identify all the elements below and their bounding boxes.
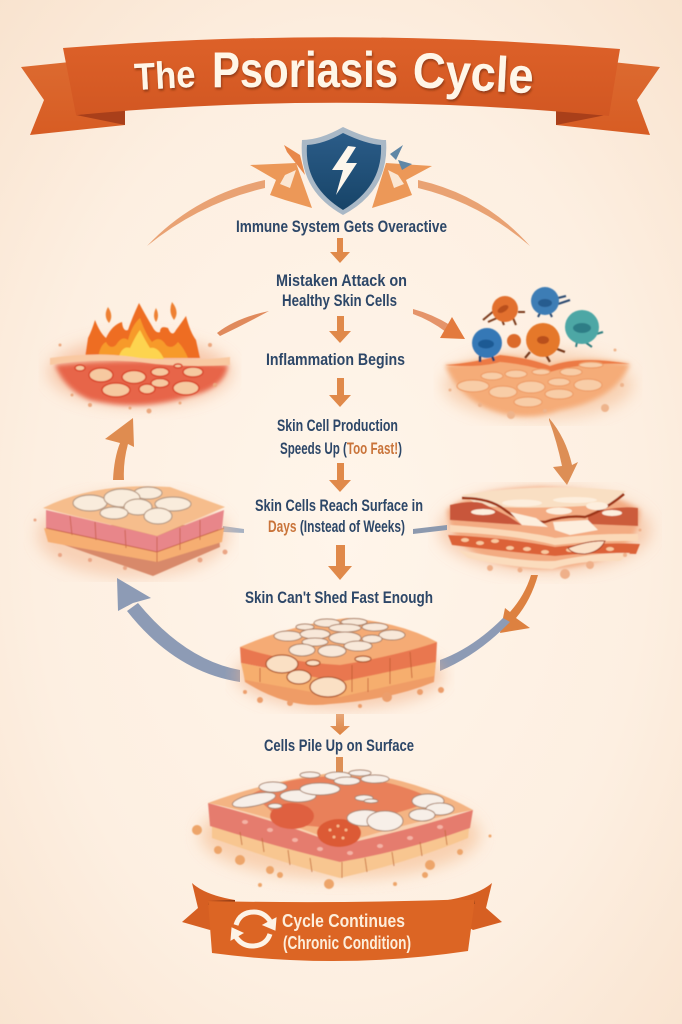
flames [85,303,200,358]
brick lines [260,652,412,692]
dome patch [317,819,361,847]
large orange cell [525,323,565,362]
label: reach surface: Days (Instead of Weeks) [268,517,405,536]
label: mistaken attack [276,271,407,310]
label: reach surface [255,496,423,536]
label: production [277,416,402,458]
red patches [250,776,435,827]
illustration: flames on skin [48,302,232,414]
label: production: Skin Cell Production [277,416,398,435]
label: inflammation: Inflammation Begins [266,350,405,369]
arrow 7 stem [336,757,343,773]
footer banner [182,883,502,961]
title: Psoriasis [212,42,398,98]
red speckled layer [448,535,640,556]
left dark band [450,502,522,525]
speckles [448,348,624,419]
layers base [447,487,640,569]
small orange cell [507,334,521,348]
crack line [462,494,624,522]
illustration: plaque-covered skin [192,770,492,889]
label: mistaken attack: Mistaken Attack on [276,271,407,290]
footer left tail [182,883,235,930]
speckles [58,343,217,414]
label: production: Speeds Up (Too Fast!) [280,439,402,458]
top surface [208,772,473,844]
teal cell [565,310,603,347]
right dark band [588,507,638,526]
arrow: attack to immune cells [413,309,465,339]
arrow 3 [329,378,351,407]
label: cannot shed: Skin Can't Shed Fast Enough [245,588,433,607]
skin band [50,354,230,366]
blue cell [531,287,570,317]
illustration: left block with white plaques [34,486,229,577]
flake lower [568,541,605,554]
speckles [192,825,492,889]
top surface [43,486,225,536]
skin top band [445,355,630,372]
inflamed tissue [55,361,228,405]
brick lines [46,516,224,562]
arrow 6 [330,714,350,735]
connector: right layers [413,525,447,534]
footer text: (Chronic Condition) [283,933,411,953]
lower mass [243,660,436,705]
arrow: immune cells to layers [549,418,578,485]
orange cell [483,296,525,325]
lower pale band [458,550,630,569]
top arcs into shield [147,180,530,246]
icon: cycle arrows [231,912,276,946]
skin mass [445,355,630,416]
blue cell lower [472,328,502,362]
arrow 1 [330,238,350,263]
banner folds [76,110,606,125]
orange brick layer [44,528,224,562]
arrow 4 [329,463,351,492]
cells [75,364,203,397]
footer text [282,911,411,953]
banner right tail [556,62,660,135]
brick lines [240,830,447,878]
illustration: center block [236,618,444,709]
top surface [240,618,437,665]
label: mistaken attack: Healthy Skin Cells [282,291,397,310]
arrow 2 [329,316,351,343]
top pale layer [462,487,626,508]
title: The [133,54,196,99]
footer body [208,899,475,961]
orange brick layer [241,662,436,697]
speckles [34,518,228,570]
title banner [21,37,660,135]
footer folds [208,899,475,905]
pink layer [46,510,224,552]
title [133,42,535,104]
arrow: center back to left block [117,578,240,682]
arrow 5 [328,545,352,580]
skin cells [457,362,603,407]
icon: shield with lightning bolt [302,127,386,215]
halo [443,351,633,419]
pink band [208,803,473,862]
white flakes [471,497,622,535]
connector: left block [223,526,244,533]
banner body [63,37,620,116]
pink layer [240,642,437,682]
white scaly plaques [231,770,454,831]
footer right tail [448,883,502,930]
halo [37,493,229,577]
label: reach surface: Skin Cells Reach Surface in [255,496,423,515]
white plaques [73,487,191,524]
speckles [243,687,444,708]
illustration: immune cells on skin [443,287,633,419]
arrow: right down to center [440,575,538,671]
dermis [48,525,220,576]
footer text: Cycle Continues [282,911,405,931]
large embedded cells [266,655,371,697]
white plaques [274,618,405,657]
label: pile up: Cells Pile Up on Surface [264,736,414,755]
halo [48,338,232,406]
arrow: attack to flames [217,311,269,336]
halo [200,791,480,879]
arrow: left block up to flames [105,418,134,480]
brick layer [212,820,470,878]
pale band [450,525,638,545]
illustration: layered skin right [439,487,651,579]
speckles [487,528,642,579]
halo [439,488,651,572]
title: Cycle [411,42,535,104]
pink band dots [242,820,443,855]
halo [236,641,444,709]
banner left tail [21,62,125,135]
icon: orange burst wings [250,145,432,208]
label: immune system: Immune System Gets Overactive [236,217,447,236]
